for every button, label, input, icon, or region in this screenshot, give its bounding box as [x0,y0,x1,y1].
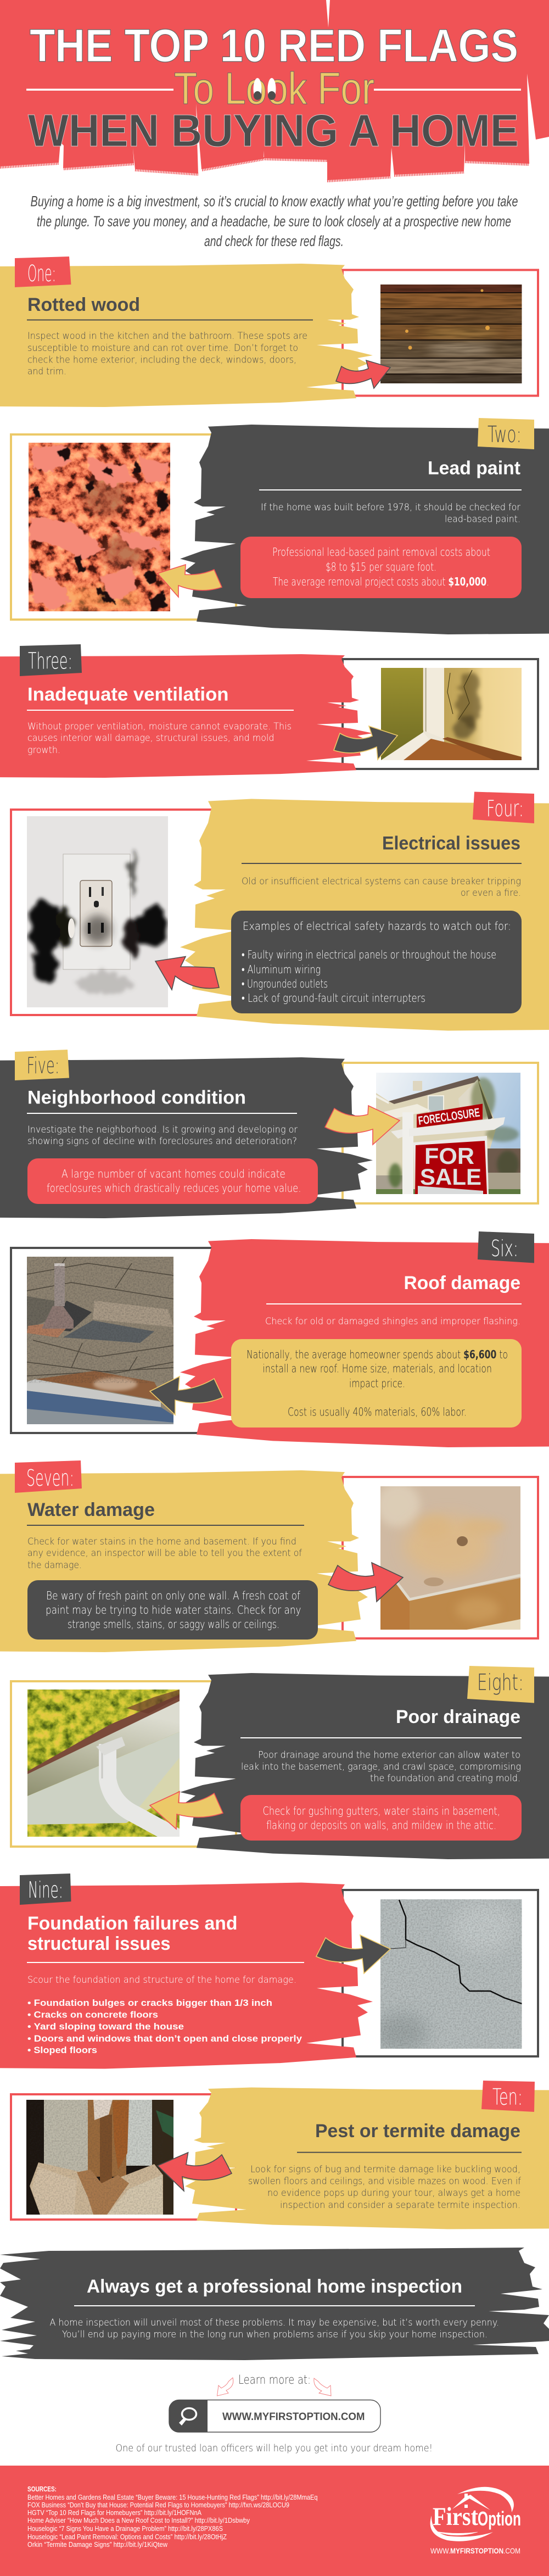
heading rule [27,1525,304,1526]
heading: Lead paint [428,458,520,479]
body text: the foundation and creating mold. [370,1773,520,1783]
logo wordmark first: First [433,2502,478,2531]
arrow [336,360,390,388]
body text [49,2317,499,2340]
body text: Look for signs of bug and termite damage like buckling wood, [250,2164,520,2174]
heading: Pest or termite damage [315,2121,520,2142]
body text: swollen floors and ceilings, and visible mazes on wood. Even if [248,2176,521,2187]
body text: or even a fire. [461,888,521,898]
panel: six roof damage [11,1231,549,1447]
brush background [0,1883,373,2069]
sign text foreclosure: FORECLOSURE [417,1105,481,1128]
photo: mold in window corner [381,668,522,760]
body text: no evidence pops up during your tour, always get a home [267,2188,520,2198]
photo: termite-damaged post [26,2100,173,2215]
intro text [31,193,518,249]
body text: Check for old or damaged shingles and improper flashing. [265,1316,520,1326]
callout [231,1339,522,1428]
callout [27,1580,318,1640]
image frame [343,659,538,769]
image frame [11,1248,236,1433]
body text: leak into the basement, garage, and crawl space, compromising [241,1761,521,1772]
tag label: Seven: [26,1465,74,1491]
body text [27,721,292,755]
callout: $8 to $15 per square foot. [326,560,436,573]
callout: foreclosures which drastically reduces your home value. [47,1181,301,1195]
number tag [15,257,71,287]
paint flakes [30,445,168,611]
body text: You’ll end up paying more in the long run when problems arise if you skip your home inspection. [62,2329,488,2340]
body text: Check for water stains in the home and basement. If you find [27,1536,296,1547]
number tag [481,2081,535,2112]
heading: Neighborhood condition [27,1088,246,1108]
panel: two lead paint [11,418,549,634]
brush background [180,1239,549,1447]
number tag [20,1874,71,1905]
brush background [0,264,373,407]
tag label: One: [27,260,56,287]
title line 2: To Look For [174,64,374,114]
heading rule [27,710,294,711]
callout: A large number of vacant homes could indicate [61,1167,285,1180]
panel: three inadequate ventilation [0,644,538,778]
sources: HGTV “Top 10 Red Flags for Homebuyers” http://bit.ly/1HOFNnA [27,2508,201,2517]
callout: Nationally, the average homeowner spends about $6,600 to [247,1348,508,1361]
body text: lead-based paint. [445,514,520,524]
photo: foreclosure sign and house [376,1073,520,1194]
tag label: Six: [491,1235,518,1262]
callout: Professional lead-based paint removal costs about [272,545,490,559]
photo: cracked concrete [373,1899,522,2051]
body text: and trim. [27,366,66,377]
url: WWW.MYFIRSTOPTION.COM [222,2411,365,2423]
body text: Scour the foundation and structure of the home for damage. [27,1975,296,1985]
body text: Inspect wood in the kitchen and the bathroom. These spots are [27,331,307,341]
heading rule [297,2152,522,2153]
photo: water-stained ceiling [376,1483,520,1630]
smoke marks [30,849,169,993]
bullet list [27,1998,302,2055]
sources [27,2485,317,2549]
number tag [15,1460,82,1493]
arrow [150,1792,223,1829]
heading: Rotted wood [27,294,140,315]
number tag [467,1666,534,1703]
image frame [343,1890,538,2056]
heading: Water damage [27,1499,155,1520]
panel: ten pest or termite damage [11,2081,549,2229]
callout: install a new roof. Home size, materials, and location [262,1362,492,1375]
number tag [478,418,534,449]
heading: Poor drainage [396,1707,520,1727]
learn more at label: Learn more at: [238,2373,311,2387]
brush background [180,799,549,1031]
arrow [334,726,397,760]
panel: five neighborhood condition [0,1050,538,1218]
body text [248,2164,521,2210]
number tag [20,644,82,676]
heading rule [259,489,522,490]
callout: Cost is usually 40% materials, 60% labor. [288,1405,467,1418]
sources: SOURCES: [27,2485,57,2493]
callout [240,537,522,598]
heading rule [240,1737,522,1738]
panel: seven water damage [0,1460,538,1652]
closing line: One of our trusted loan officers will help you get into your dream home! [115,2443,433,2454]
sign text for: FOR [424,1143,474,1169]
tag label: Eight: [477,1669,524,1696]
tag label: Two: [488,421,522,448]
body text [241,1750,521,1783]
callout: flaking or deposits on walls, and mildew in the attic. [266,1819,496,1832]
tag label: Nine: [28,1877,63,1903]
heading: Always get a professional home inspection [87,2276,462,2297]
photo: damaged roof [27,1257,173,1424]
panel: four electrical issues [11,792,549,1031]
arrow [328,1563,403,1602]
body text: If the home was built before 1978, it should be checked for [261,502,520,512]
sources: Houselogic “7 Signs You Have a Drainage Problem” http://bit.ly/28PX86S [27,2524,223,2533]
bullet list: • Sloped floors [27,2045,97,2055]
image frame [343,1063,538,1203]
photo: wood planks [380,285,522,383]
body text [27,331,307,377]
body text: Investigate the neighborhood. Is it growing and developing or [27,1124,298,1135]
callout: impact price. [349,1376,405,1390]
body text [261,502,520,524]
arrow [325,1106,400,1145]
bullet list: • Cracks on concrete floors [27,2009,158,2020]
image frame [11,2094,236,2220]
footer band [0,2466,549,2576]
photo: burnt outlet [27,816,169,1007]
brush background [180,2087,549,2229]
image frame [343,1477,538,1638]
callout: Be wary of fresh paint on only one wall. A fresh coat of [46,1589,300,1602]
tag label: Four: [486,795,524,822]
body text: check the home exterior, including the deck, windows, doors, [27,355,296,365]
callout [231,911,522,1013]
image frame [11,434,236,620]
heading: Inadequate ventilation [27,684,228,705]
bullet list: • Doors and windows that don’t open and close properly [27,2033,302,2044]
callout: strange smells, stains, or saggy walls or ceilings. [68,1618,279,1631]
number tag [15,1050,69,1080]
arrow [150,1376,223,1415]
heading rule [27,1113,297,1114]
logo url: WWW.MYFIRSTOPTION.COM [430,2546,520,2555]
icon: right arrow outline [314,2378,331,2396]
search bar [169,2400,380,2432]
panel: one rotted wood [0,257,538,407]
image frame [11,1681,236,1847]
panel: eight poor drainage [11,1666,549,1859]
body text: Old or insufficient electrical systems can cause breaker tripping [242,876,521,886]
heading: Foundation failures and [27,1913,237,1934]
heading [27,1913,237,1954]
callout: Check for gushing gutters, water stains in basement, [262,1804,500,1817]
arrow [316,1935,390,1973]
body text: the damage. [27,1560,82,1570]
brush background [180,1673,549,1859]
title left rule [26,89,173,91]
brush background [0,654,373,778]
heading rule [266,1303,522,1304]
body text: causes interior wall damage, structural issues, and mold [27,733,274,743]
title right rule [374,89,521,91]
body text: A home inspection will unveil most of these problems. It may be expensive, but it’s worth every penny. [49,2317,499,2328]
heading rule [27,320,313,321]
callout: The average removal project costs about $10,000. [273,575,489,588]
heading: structural issues [27,1933,170,1954]
sources: Home Adviser “How Much Does a New Roof Cost to Install?” http://bit.ly/1Dsbwby [27,2516,250,2524]
tag label: Ten: [492,2084,523,2110]
sources: Better Homes and Gardens Real Estate “Buyer Beware: 15 House-Hunting Red Flags” http://bit.ly/28MmaEq [27,2493,317,2501]
callout: • Lack of ground-fault circuit interrupters [242,991,425,1005]
body text [242,876,521,898]
heading: Electrical issues [382,833,520,854]
image frame [11,810,236,1015]
bullet list: • Yard sloping toward the house [27,2021,184,2032]
image frame [343,270,538,395]
logo [430,2487,521,2555]
body text: showing signs of decline with foreclosures and deterioration? [27,1136,297,1146]
body text: Poor drainage around the home exterior can allow water to [258,1750,520,1760]
icon: left arrow outline [217,2378,233,2396]
heading rule [27,1962,304,1963]
callout: • Ungrounded outlets [242,977,328,990]
panel: always get a professional home inspection [0,2248,549,2360]
sources: FOX Business “Don’t Buy that House: Potential Red Flags to Homebuyers” http://fxn.ws/28LOCU9 [27,2501,289,2509]
body text: any evidence, an inspector will be able to tell you the extent of [27,1548,302,1558]
callout [240,1795,522,1841]
title line 3: WHEN BUYING A HOME [28,105,519,156]
body text [27,1124,298,1146]
callout [27,1158,318,1204]
arrow [158,2153,232,2191]
icon: eyes in the double o [254,78,276,100]
heading rule [74,2305,475,2306]
heading: Roof damage [404,1273,520,1293]
bullet list: • Foundation bulges or cracks bigger than 1/3 inch [27,1998,272,2008]
brush background [0,1057,373,1218]
photo: gutter and downspout [27,1690,184,1841]
icon: magnifying glass [179,2408,197,2426]
body text: susceptible to moisture and can rot over time. Don’t forget to [27,343,298,353]
body text: inspection and consider a separate termite inspection. [280,2200,520,2210]
number tag [478,1231,534,1263]
callout: Examples of electrical safety hazards to watch out for: [243,919,511,933]
callout: paint may be trying to hide water stains. Check for any [46,1603,301,1616]
heading rule [242,863,522,864]
panel: nine foundation failures [0,1874,538,2069]
body text: growth. [27,745,60,755]
tag label: Five: [26,1052,59,1079]
logo wordmark option: Option [478,2507,521,2530]
sources: Orkin “Termite Damage Signs” http://bit.ly/1KiQtew [27,2540,168,2549]
brush background [180,425,549,634]
header banner [0,0,549,181]
callout: • Aluminum wiring [242,963,321,976]
body text: Without proper ventilation, moisture cannot evaporate. This [27,721,292,732]
number tag [473,792,534,823]
sources: Houselogic “Lead Paint Removal: Options and Costs” http://bit.ly/28OtHjZ [27,2533,227,2541]
tag label: Three: [28,648,72,674]
sign text sale: SALE [420,1164,481,1190]
brush background [0,2248,549,2360]
arrow [158,565,222,597]
brush background [0,1470,373,1652]
photo: peeling paint [29,443,170,611]
body text [27,1536,302,1570]
intro text: and check for these red flags. [204,233,344,249]
arrow [155,957,219,990]
